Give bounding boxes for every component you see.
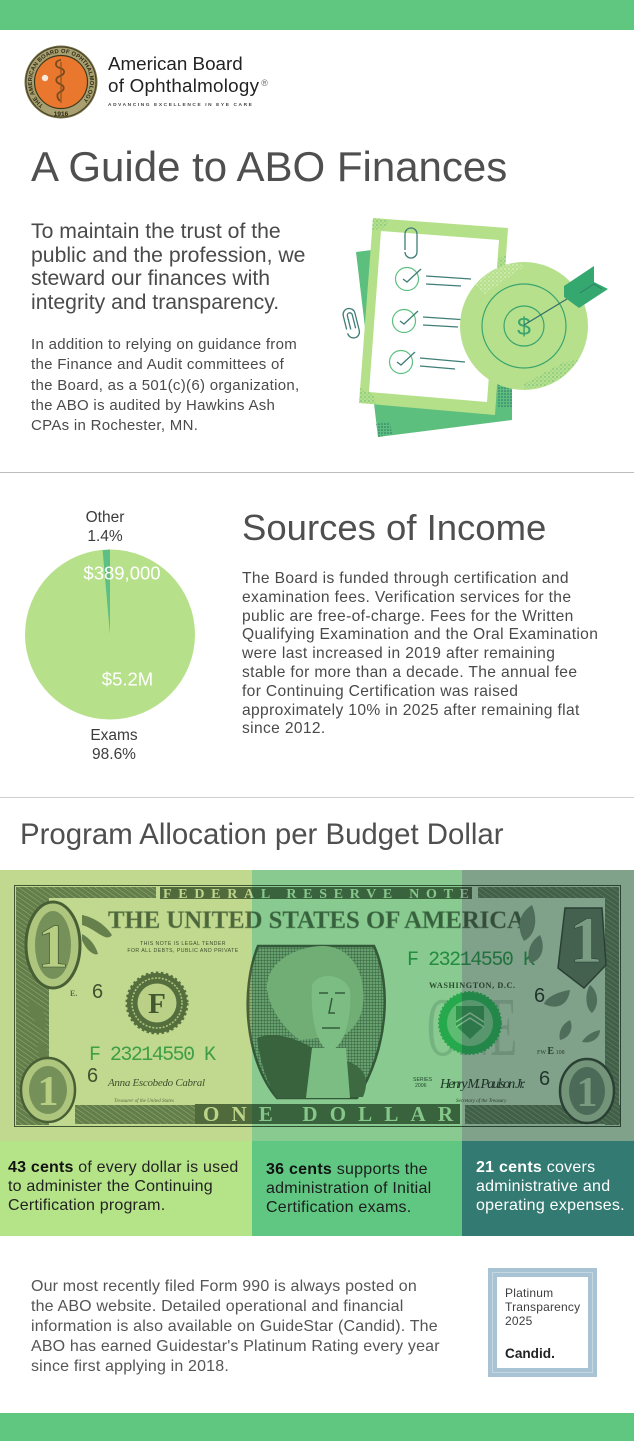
dollar bill image with tinted overlays: F: [148, 988, 166, 1020]
intro statement: integrity and transparency.: [31, 291, 279, 314]
pie chart: sources of income: Exams: [90, 727, 138, 744]
panel: 36 cents: [252, 1141, 462, 1236]
dollar bill image with tinted overlays: 1: [570, 904, 602, 977]
intro statement: [31, 220, 305, 314]
bottom text: ONE DOLLAR: [203, 1102, 454, 1126]
badge brand: Candid.: [505, 1346, 555, 1361]
tint overlays: [0, 870, 252, 1141]
badge text: Platinum: [505, 1286, 553, 1300]
right serial and numbers: F 23214550 K: [407, 949, 535, 972]
bill top text: FEDERAL RESERVE NOTE: [163, 887, 469, 902]
panel: 43 cents: Certification program.: [8, 1197, 165, 1214]
right big one: [558, 908, 606, 988]
heading: sources of income: Sources of Income: [242, 507, 546, 548]
pie chart: sources of income: $389,000: [83, 562, 161, 584]
front sheet: [359, 218, 508, 415]
dollar bill image with tinted overlays: Anna Escobedo Cabral: [107, 1077, 205, 1089]
dollar bill image with tinted overlays: 1: [576, 1070, 598, 1116]
logo wordmark: of Ophthalmology®: [108, 74, 268, 96]
badge text: [505, 1286, 580, 1328]
portrait: [248, 946, 385, 1098]
panel: 36 cents: administration of Initial: [266, 1180, 431, 1197]
back green sheet: [356, 249, 512, 437]
dollar bill image with tinted overlays: THIS NOTE IS LEGAL TENDER: [140, 941, 226, 947]
income paragraph: approximately 10% in 2025 after remaining flat: [242, 702, 580, 719]
check items: [390, 268, 418, 374]
logo: American Board of Ophthalmology: [24, 46, 268, 118]
audit paragraph: the ABO is audited by Hawkins Ash: [31, 397, 275, 414]
title: A Guide to ABO Finances: [31, 143, 507, 190]
icon: ABO seal: 1916: [54, 111, 69, 118]
form 990 paragraph: [31, 1278, 440, 1375]
icon: ABO seal: THE AMERICAN BOARD OF OPHTHALMOLOGY: [28, 48, 94, 108]
lower right one: [560, 1059, 614, 1123]
heading: program allocation: Program Allocation per Budget Dollar: [20, 818, 504, 851]
logo wordmark: [108, 53, 268, 96]
dollar bill image with tinted overlays: 6: [539, 1068, 550, 1090]
dollar bill image with tinted overlays: 6: [92, 981, 103, 1003]
left big one: [26, 902, 80, 988]
form 990 paragraph: information is also available on GuideStar (Candid). The: [31, 1318, 438, 1335]
panel: 21 cents: [462, 1141, 634, 1236]
pie chart: sources of income: 98.6%: [92, 746, 136, 763]
intro statement: To maintain the trust of the: [31, 220, 281, 243]
target: [460, 262, 588, 390]
form 990 paragraph: the ABO website. Detailed operational and financial: [31, 1298, 403, 1315]
audit paragraph: the Board, as a 501(c)(6) organization,: [31, 377, 300, 394]
income paragraph: Qualifying Examination and the Oral Examination: [242, 626, 598, 643]
dollar bill image with tinted overlays: Henry M. Paulson Jr.: [439, 1077, 525, 1092]
divider: [0, 472, 634, 473]
audit paragraph: In addition to relying on guidance from: [31, 336, 297, 353]
panel: 43 cents: 43 cents of every dollar is used: [8, 1159, 239, 1176]
logo tagline: ADVANCING EXCELLENCE IN EYE CARE: [108, 103, 253, 108]
dollar bill image with tinted overlays: ONE: [427, 981, 517, 1074]
panel: 21 cents: administrative and: [476, 1178, 610, 1195]
dollar bill image with tinted overlays: Treasurer of the United States: [114, 1099, 174, 1104]
pie chart: sources of income: Other: [86, 509, 124, 526]
dollar bill image with tinted overlays: E.: [70, 989, 77, 998]
income paragraph: examination fees. Verification services for the: [242, 589, 571, 606]
paper clip left: [342, 307, 361, 339]
dollar bill image with tinted overlays: 6: [534, 985, 545, 1007]
washington and watermark one: WASHINGTON, D.C.: [429, 981, 515, 990]
dollar bill image with tinted overlays: 2006: [415, 1083, 427, 1089]
top banner: [0, 0, 634, 30]
income paragraph: stable for more than a decade. The annual fee: [242, 664, 577, 681]
lower left one: [21, 1058, 75, 1122]
pie chart: sources of income: $5.2M: [102, 668, 153, 690]
dollar bill image with tinted overlays: 1: [38, 1069, 58, 1115]
federal reserve seal: [127, 973, 187, 1033]
illustration: checklist and dollar target: [342, 218, 608, 437]
pie chart: sources of income: [25, 509, 195, 763]
income paragraph: were last increased in 2019 after remaining: [242, 645, 555, 662]
badge text: 2025: [505, 1314, 532, 1328]
dollar bill image with tinted overlays: FW E 108: [537, 1046, 565, 1057]
dollar bill image with tinted overlays: THE UNITED STATES OF AMERICA: [108, 905, 526, 934]
panel: 36 cents: 36 cents supports the: [266, 1161, 428, 1178]
left serial and numbers: F 23214550 K: [89, 1044, 216, 1067]
dollar bill image with tinted overlays: [0, 870, 634, 1141]
panel: 43 cents: [0, 1141, 252, 1236]
audit paragraph: [31, 336, 300, 434]
panel: 21 cents: 21 cents covers: [476, 1159, 595, 1176]
income paragraph: for Continuing Certification was raised: [242, 683, 518, 700]
intro statement: steward our finances with: [31, 267, 270, 290]
dollar bill image with tinted overlays: Secretary of the Treasury: [456, 1099, 507, 1104]
panel: 43 cents: to administer the Continuing: [8, 1178, 213, 1195]
pie chart: sources of income: 1.4%: [87, 528, 123, 545]
form 990 paragraph: Our most recently filed Form 990 is always posted on: [31, 1278, 417, 1295]
illustration: checklist and dollar target: $: [517, 313, 531, 341]
intro statement: public and the profession, we: [31, 244, 305, 267]
paper clip top: [405, 228, 417, 258]
arrow: [524, 285, 590, 325]
divider: [0, 797, 634, 798]
form 990 paragraph: ABO has earned Guidestar's Platinum Rating every year: [31, 1338, 440, 1355]
audit paragraph: the Finance and Audit committees of: [31, 356, 284, 373]
income paragraph: public are free-of-charge. Fees for the Written: [242, 608, 574, 625]
income paragraph: The Board is funded through certification and: [242, 570, 569, 587]
bottom banner: [0, 1413, 634, 1441]
income paragraph: since 2012.: [242, 720, 326, 737]
dollar bill image with tinted overlays: SERIES: [413, 1077, 433, 1083]
form 990 paragraph: since first applying in 2018.: [31, 1358, 229, 1375]
income paragraph: [242, 570, 598, 737]
badge: Candid platinum transparency: [488, 1268, 597, 1377]
dollar bill image with tinted overlays: 6: [87, 1065, 98, 1087]
treasury seal: [439, 992, 501, 1054]
logo wordmark: American Board: [108, 53, 243, 74]
dollar bill image with tinted overlays: FOR ALL DEBTS, PUBLIC AND PRIVATE: [127, 948, 239, 954]
audit paragraph: CPAs in Rochester, MN.: [31, 417, 198, 434]
panel: 21 cents: operating expenses.: [476, 1197, 625, 1214]
badge text: Transparency: [505, 1300, 580, 1314]
bill frame: [14, 886, 620, 1126]
dollar bill image with tinted overlays: 1: [38, 913, 68, 981]
panel: 36 cents: Certification exams.: [266, 1199, 412, 1216]
